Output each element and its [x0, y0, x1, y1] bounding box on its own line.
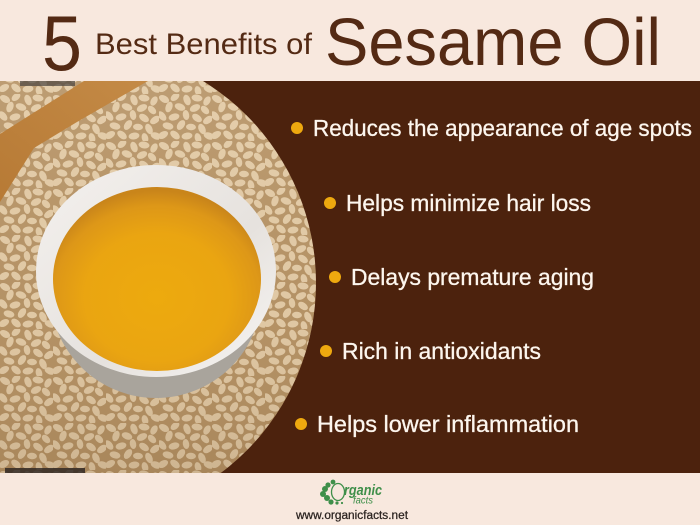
title: Sesame Oil	[325, 5, 661, 80]
wooden spoon	[0, 81, 148, 202]
photo: sesame seeds and bowl	[0, 81, 316, 473]
title: 5	[42, 0, 82, 87]
benefits list	[291, 115, 692, 437]
logo: Organic Facts	[295, 480, 409, 522]
benefit 2: Helps minimize hair loss	[346, 190, 591, 216]
benefit 1: Reduces the appearance of age spots	[313, 115, 692, 141]
logo: Organic Facts: facts	[353, 496, 373, 506]
benefit 4: Rich in antioxidants	[342, 338, 541, 364]
benefit 5: Helps lower inflammation	[317, 411, 579, 437]
title	[42, 0, 661, 87]
title: Best Benefits of	[95, 28, 313, 61]
icon: leaf ring	[320, 480, 344, 505]
benefit 3: Delays premature aging	[351, 264, 594, 290]
oil	[53, 187, 261, 371]
logo: Organic Facts: rganic	[344, 482, 383, 499]
bowl	[36, 165, 276, 398]
panel: brown background	[0, 81, 700, 473]
website url: www.organicfacts.net	[295, 510, 409, 522]
sesame seeds	[0, 81, 316, 473]
